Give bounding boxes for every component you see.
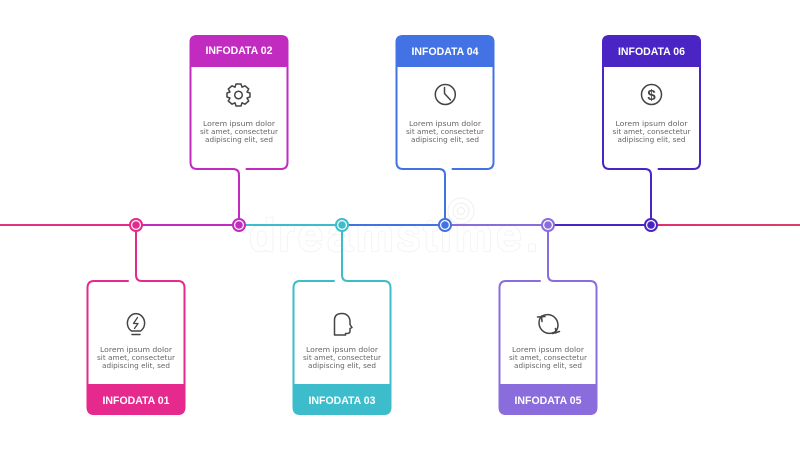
card 1 body text: sit amet, consectetur xyxy=(97,354,175,362)
node 5 xyxy=(542,219,554,231)
card 4 outline and connector xyxy=(396,36,494,225)
card 5 header xyxy=(499,384,597,415)
icon: head profile xyxy=(334,314,352,335)
card 2 body text: sit amet, consectetur xyxy=(200,128,278,136)
watermark: dreamstime. xyxy=(250,211,538,260)
node 2 xyxy=(233,219,245,231)
card 5 body text: Lorem ipsum dolor xyxy=(512,346,584,354)
panel: infodata 05 xyxy=(499,219,597,415)
panel: infodata 01 xyxy=(87,219,185,415)
card 1 body text xyxy=(97,346,175,370)
card 4 title: INFODATA 04 xyxy=(412,46,479,58)
card 3 body text: adipiscing elit, sed xyxy=(308,362,376,370)
card 5 body text: sit amet, consectetur xyxy=(509,354,587,362)
panel: infodata 04 xyxy=(396,35,494,231)
watermark: dreamstime. xyxy=(250,211,538,260)
card 2 title: INFODATA 02 xyxy=(206,45,272,57)
node 4 xyxy=(439,219,451,231)
panel: infodata 03 xyxy=(293,219,391,415)
card 6 body text xyxy=(612,120,691,144)
card 6 title: INFODATA 06 xyxy=(618,46,685,58)
card 5 title: INFODATA 05 xyxy=(514,395,582,407)
icon: lightbulb with bolt xyxy=(127,314,145,334)
card 4 body text: adipiscing elit, sed xyxy=(411,136,479,144)
card 3 body text xyxy=(303,346,381,370)
card 1 body text: adipiscing elit, sed xyxy=(102,362,170,370)
icon: clock xyxy=(435,84,455,104)
card 2 body text: adipiscing elit, sed xyxy=(205,136,273,144)
card 4 body text: Lorem ipsum dolor xyxy=(409,120,481,128)
icon: dollar coin xyxy=(642,84,662,104)
card 6 body text: adipiscing elit, sed xyxy=(618,136,686,144)
card 4 body text: sit amet, consectetur xyxy=(406,128,484,136)
card 6 header xyxy=(602,35,700,67)
card 1 body text: Lorem ipsum dolor xyxy=(100,346,172,354)
card 2 body text xyxy=(200,120,278,144)
card 2 outline and connector xyxy=(190,36,288,225)
icon: dollar coin: $ xyxy=(647,87,656,104)
card 2 header xyxy=(190,35,288,67)
card 1 outline and connector xyxy=(88,225,184,414)
icon: gear xyxy=(227,84,250,106)
panel: infodata 06 xyxy=(602,35,700,231)
icon: refresh arrows xyxy=(538,315,560,334)
card 5 body text: adipiscing elit, sed xyxy=(514,362,582,370)
card 5 body text xyxy=(509,346,587,370)
card 6 body text: sit amet, consectetur xyxy=(612,128,691,136)
card 3 header xyxy=(293,384,391,415)
card 2 body text: Lorem ipsum dolor xyxy=(203,120,275,128)
card 3 outline and connector xyxy=(294,225,390,414)
panel: infodata 02 xyxy=(190,35,288,231)
card 5 outline and connector xyxy=(500,225,596,414)
card 3 body text: sit amet, consectetur xyxy=(303,354,381,362)
card 4 header xyxy=(396,35,494,67)
card 3 title: INFODATA 03 xyxy=(308,395,376,407)
card 1 title: INFODATA 01 xyxy=(102,395,170,407)
node 6 xyxy=(645,219,657,231)
node 3 xyxy=(336,219,348,231)
timeline xyxy=(0,224,800,226)
card 6 outline and connector xyxy=(603,36,700,225)
card 3 body text: Lorem ipsum dolor xyxy=(306,346,378,354)
card 4 body text xyxy=(406,120,484,144)
card 6 body text: Lorem ipsum dolor xyxy=(616,120,688,128)
node 1 xyxy=(130,219,142,231)
card 1 header xyxy=(87,384,185,415)
